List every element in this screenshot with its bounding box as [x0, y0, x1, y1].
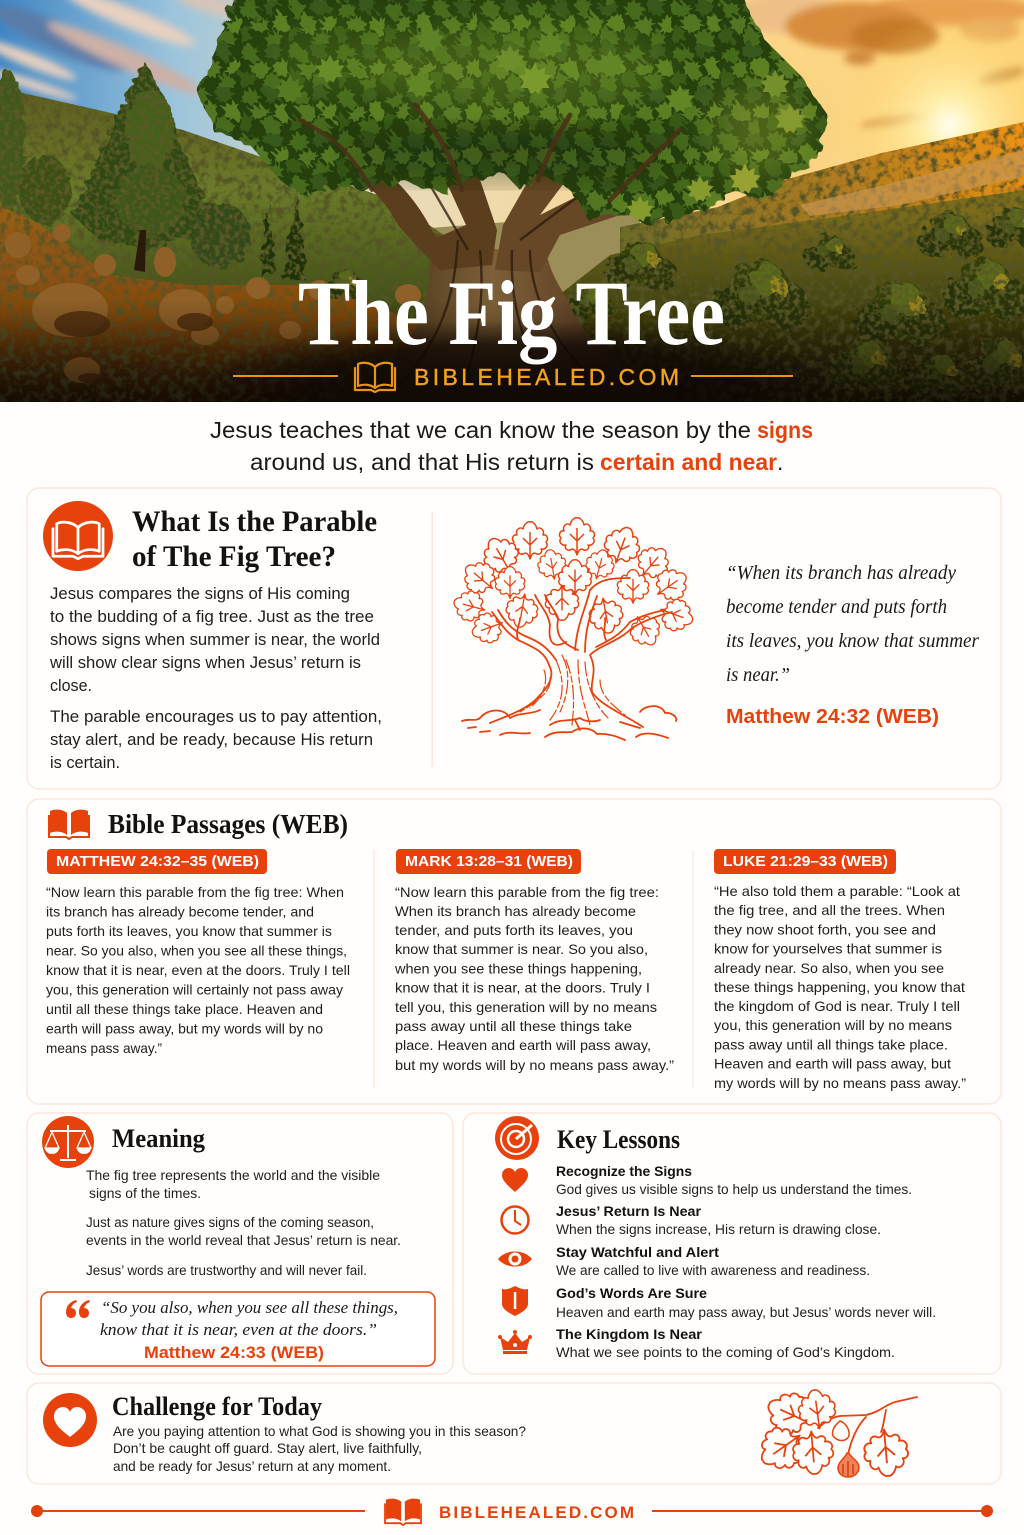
passage: mark [394, 849, 674, 1073]
lesson: jesus return is near: When the signs increase, His return is drawing close. [556, 1221, 881, 1237]
callout: quote box [41, 1292, 435, 1366]
left foreground ground and rocks [0, 205, 421, 402]
lesson: stay watchful: Stay Watchful and Alert [556, 1245, 719, 1261]
icon: open book [43, 501, 113, 571]
featured scripture quote: its leaves, you know that summer [726, 630, 979, 652]
lesson: stay watchful: We are called to live with awareness and readiness. [556, 1262, 870, 1278]
challenge text [113, 1423, 526, 1474]
parable explanation text: shows signs when summer is near, the world [50, 631, 380, 649]
callout: quote box: Matthew 24:33 (WEB) [144, 1343, 324, 1362]
intro statement: . [777, 449, 783, 475]
dark shading behind the title [0, 300, 1024, 460]
footer brand bar: BIBLEHEALED.COM [439, 1503, 634, 1522]
meaning text [86, 1167, 401, 1278]
hero banner [0, 0, 1024, 402]
passage: matthew: puts forth its leaves, you know that summer is [46, 923, 332, 939]
passage: luke: you, this generation will by no means [714, 1017, 952, 1033]
meaning heading: Meaning [112, 1124, 205, 1153]
passage: matthew: near. So you also, when you see all these things, [46, 942, 347, 958]
passage: mark: tender, and puts forth its leaves, you [395, 922, 633, 938]
lesson: jesus return is near [556, 1204, 881, 1237]
lesson: jesus return is near: Jesus’ Return Is Near [556, 1204, 701, 1220]
left trees and cypresses [0, 62, 306, 280]
right foreground bushes [324, 207, 1024, 395]
passage: matthew: MATTHEW 24:32–35 (WEB) [56, 854, 259, 870]
lesson: recognize the signs: Recognize the Signs [556, 1164, 692, 1180]
distant hazy hills [433, 215, 640, 292]
passage: luke: these things happening, you know that [714, 979, 965, 995]
parable heading: What Is the Parable [132, 505, 377, 538]
icon: clock [502, 1206, 528, 1234]
intro statement: signs [757, 417, 813, 443]
quote reference: Matthew 24:32 (WEB) [726, 706, 939, 728]
passage: mark: MARK 13:28–31 (WEB) [405, 854, 573, 870]
passage: mark: “Now learn this parable from the fig tree: [395, 884, 659, 900]
passage: luke: the kingdom of God is near. Truly I tell [714, 998, 960, 1014]
intro statement: around us, and that His return is [250, 449, 594, 475]
tree branches through the canopy [300, 105, 680, 200]
passage: mark: place. Heaven and earth will pass away, [395, 1037, 651, 1053]
illustration: fig branch [751, 1385, 917, 1478]
panel: bible passages [27, 799, 1001, 1104]
parable explanation text [49, 585, 382, 772]
passage: luke [714, 849, 966, 1091]
challenge text: Don’t be caught off guard. Stay alert, live faithfully, [113, 1440, 422, 1456]
intro statement [210, 417, 813, 475]
parable explanation text: Jesus compares the signs of His coming [50, 585, 350, 603]
lesson: gods words: Heaven and earth may pass away, but Jesus’ words never will. [556, 1304, 936, 1320]
passage: luke: LUKE 21:29–33 (WEB) [723, 854, 888, 870]
meaning text: Just as nature gives signs of the coming season, [86, 1214, 374, 1230]
passage: mark: know that summer is near. So you also, [395, 941, 648, 957]
right hillside with village [540, 122, 1024, 402]
passage: mark: When its branch has already become [395, 903, 636, 919]
icon: quotation mark [66, 1300, 90, 1318]
challenge text: and be ready for Jesus’ return at any moment. [113, 1458, 391, 1474]
lesson: recognize the signs: God gives us visible signs to help us understand the times. [556, 1181, 912, 1197]
icon: red book [49, 810, 89, 839]
passage: luke: pass away until all things take place. [714, 1036, 948, 1052]
icon: eye [498, 1252, 532, 1266]
left hillside [0, 92, 444, 324]
passage: mark: pass away until all these things take [395, 1018, 632, 1034]
lesson: the kingdom is near: What we see points to the coming of God’s Kingdom. [556, 1344, 895, 1360]
fig tree trunk and roots [370, 174, 617, 386]
sky with clouds and sun [0, 0, 1024, 228]
lesson: recognize the signs [556, 1164, 912, 1197]
bible passages heading: Bible Passages (WEB) [108, 809, 348, 839]
parable heading: of The Fig Tree? [132, 540, 336, 573]
parable heading [132, 505, 377, 573]
passage: matthew [46, 849, 350, 1056]
passage: mark: but my words will by no means pass away.” [395, 1057, 674, 1073]
icon: shield [502, 1286, 528, 1316]
panel: what is the parable [27, 488, 1001, 789]
passage: luke: already near. So also, when you see [714, 960, 944, 976]
passage: matthew: you, this generation will certainly not pass away [46, 982, 343, 998]
passage: luke: they now shoot forth, you see and [714, 922, 936, 938]
passage: luke: Heaven and earth will pass away, but [714, 1056, 951, 1072]
passage: matthew: its branch has already become tender, and [46, 904, 314, 920]
featured scripture quote [726, 562, 979, 686]
parable explanation text: The parable encourages us to pay attention, [50, 708, 382, 726]
parable explanation text: is certain. [50, 754, 120, 772]
brand row with book icon: BIBLEHEALED.COM [414, 364, 679, 390]
meaning text: events in the world reveal that Jesus’ return is near. [86, 1232, 401, 1248]
parable explanation text: to the budding of a fig tree. Just as the tree [50, 608, 374, 626]
parable explanation text: stay alert, and be ready, because His return [50, 731, 373, 749]
illustration: fig tree line art [450, 518, 698, 740]
challenge text: Are you paying attention to what God is showing you in this season? [113, 1423, 526, 1439]
icon: heart badge [43, 1393, 97, 1447]
panel: challenge for today [27, 1383, 1001, 1484]
callout: quote box: “So you also, when you see all these things, [101, 1298, 398, 1317]
key lessons heading: Key Lessons [557, 1125, 680, 1154]
passage: matthew: know that it is near, even at the doors. Truly I tell [46, 962, 350, 978]
featured scripture quote: is near.” [726, 664, 790, 686]
meaning text: signs of the times. [89, 1185, 201, 1201]
title: The Fig Tree [298, 262, 725, 364]
passage: luke: my words will by no means pass away.” [714, 1075, 966, 1091]
lesson: gods words [556, 1286, 936, 1320]
parable explanation text: close. [50, 677, 92, 695]
lesson: the kingdom is near: The Kingdom Is Near [556, 1327, 702, 1343]
passage: mark: know that it is near, at the doors. Truly I [395, 980, 650, 996]
meaning text: Jesus’ words are trustworthy and will never fail. [86, 1262, 367, 1278]
brand row with book icon [233, 363, 793, 392]
left tree trunk [134, 230, 146, 272]
passage: luke: know for yourselves that summer is [714, 940, 942, 956]
passage: luke: the fig tree, and all the trees. When [714, 902, 945, 918]
passage: matthew: means pass away.” [46, 1040, 162, 1056]
callout: quote box: know that it is near, even at the doors.” [100, 1320, 377, 1339]
icon: crown [498, 1330, 532, 1354]
passage: mark: when you see these things happening, [394, 960, 642, 976]
passage: matthew: earth will pass away, but my words will by no [46, 1020, 323, 1036]
panel: meaning [27, 1113, 453, 1374]
fig tree canopy [196, 0, 826, 225]
passage: matthew: until all these things take place. Heaven and [46, 1001, 323, 1017]
parable explanation text: will show clear signs when Jesus’ return is [49, 654, 361, 672]
lesson: the kingdom is near [556, 1327, 895, 1360]
passage: matthew: “Now learn this parable from the fig tree: When [46, 884, 344, 900]
icon: scales [42, 1116, 94, 1168]
icon: target [495, 1116, 539, 1160]
intro statement: certain and near [600, 449, 777, 475]
passage: luke: “He also told them a parable: “Look at [714, 883, 960, 899]
lesson: gods words: God’s Words Are Sure [556, 1286, 707, 1302]
icon: heart [502, 1168, 528, 1192]
panel: key lessons [463, 1113, 1001, 1374]
featured scripture quote: “When its branch has already [726, 562, 956, 584]
lesson: stay watchful [556, 1245, 870, 1278]
passage: mark: tell you, this generation will by no means [395, 999, 657, 1015]
intro statement: Jesus teaches that we can know the season by the [210, 417, 751, 443]
footer brand bar [31, 1499, 993, 1525]
meaning text: The fig tree represents the world and the visible [86, 1167, 380, 1183]
challenge heading: Challenge for Today [112, 1392, 322, 1421]
featured scripture quote: become tender and puts forth [726, 596, 947, 618]
